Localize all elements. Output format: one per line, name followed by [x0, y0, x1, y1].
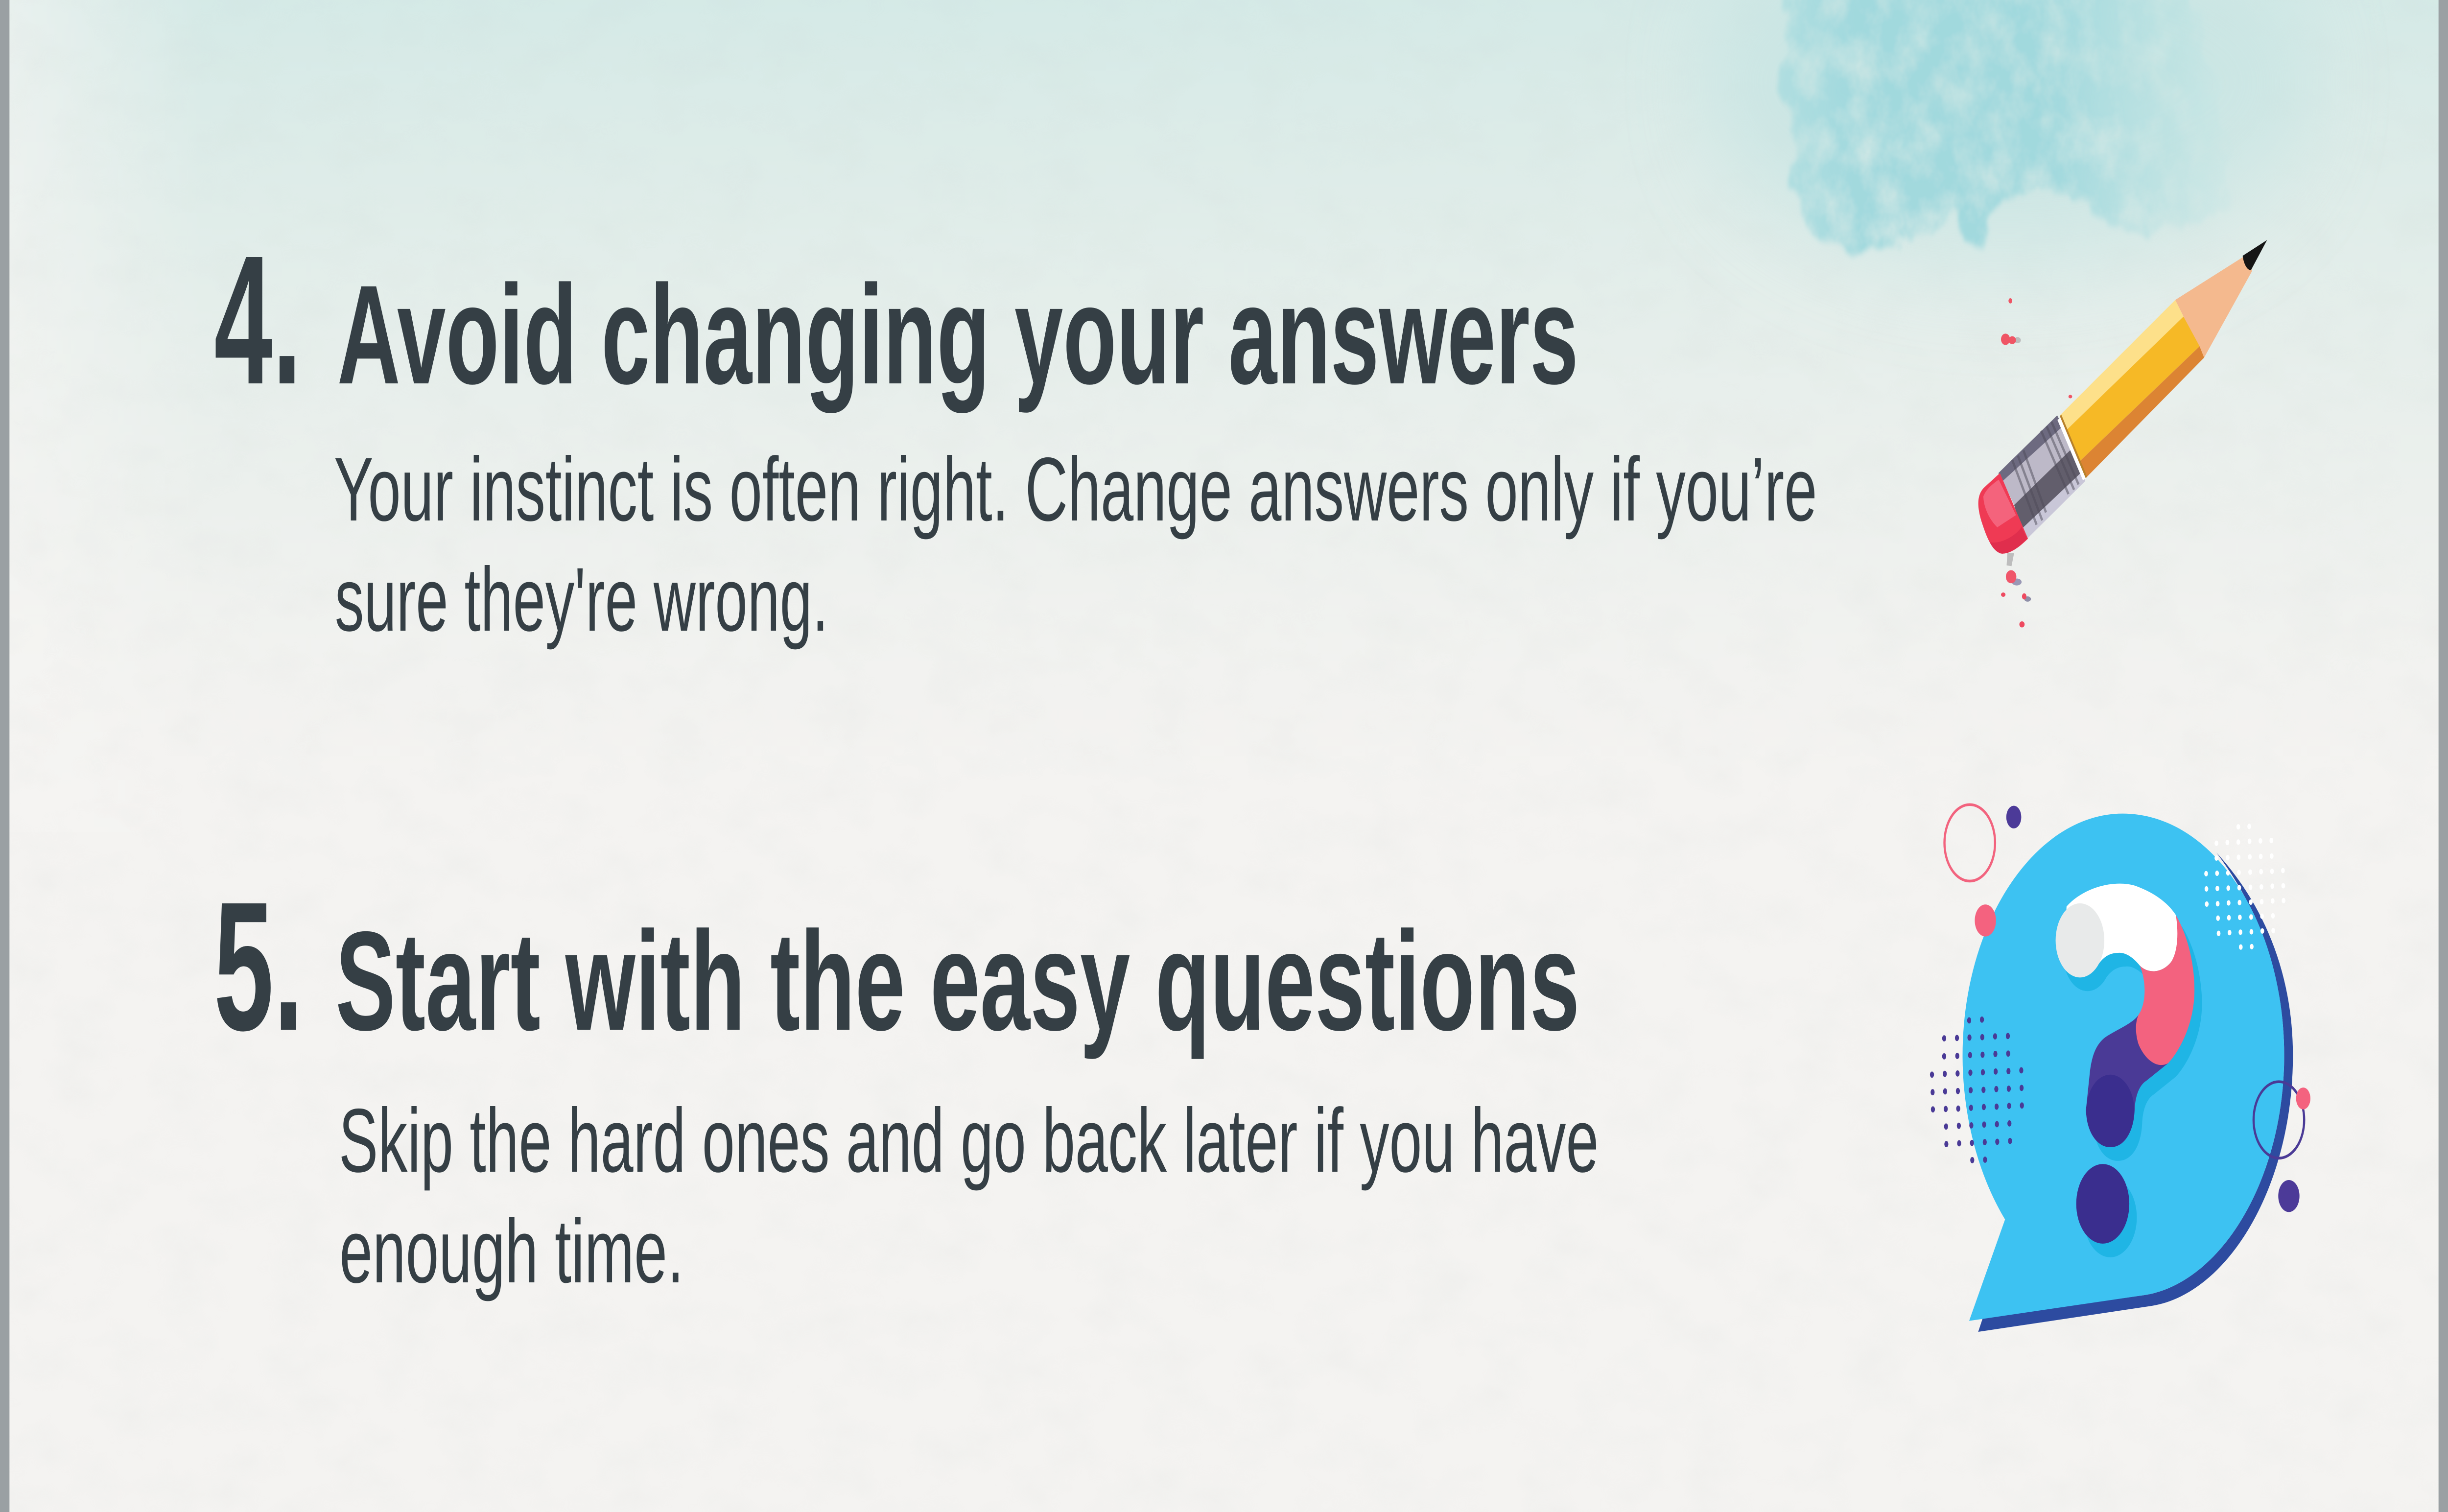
item 5 heading: Start with the easy questions: [335, 902, 1580, 1060]
item 4 heading: 4.: [214, 217, 302, 423]
icon: pencil with eraser crumbs: [1978, 240, 2267, 627]
icon: question mark speech bubble: [1930, 804, 2310, 1332]
question mark shadow: [2063, 898, 2202, 1257]
item 4 body text: [334, 439, 1817, 650]
eraser crumbs: [2001, 298, 2072, 627]
watercolor halo: [1697, 0, 2317, 260]
pencil wood tip: [2175, 255, 2252, 357]
purple halftone dots: [1930, 1016, 2024, 1163]
pencil ferrule: [1999, 415, 2086, 539]
watercolor blotch: [1783, 0, 2233, 259]
question mark: [2056, 884, 2194, 1244]
pencil eraser: [1978, 473, 2028, 554]
side border: left: [0, 0, 9, 1512]
item 5 body text: [339, 1090, 1599, 1302]
bubble: [1963, 814, 2284, 1321]
item 4 body text: sure they're wrong.: [335, 549, 828, 650]
bubble shadow: [1978, 852, 2293, 1332]
item 5 body text: Skip the hard ones and go back later if you have: [339, 1090, 1599, 1191]
item 5 body text: enough time.: [339, 1201, 684, 1302]
pencil body: [2060, 300, 2204, 476]
item 5 heading: 5.: [214, 864, 304, 1069]
pencil lead: [2243, 240, 2267, 270]
side border: right: [2439, 0, 2448, 1512]
item 4 heading: [214, 217, 1578, 423]
decorative circles: [1945, 804, 2310, 1212]
item 5 heading: [214, 864, 1580, 1069]
item 4 body text: Your instinct is often right. Change answers only if you’re: [334, 439, 1817, 540]
white halftone dots: [2204, 824, 2285, 950]
item 4 heading: Avoid changing your answers: [337, 256, 1578, 413]
